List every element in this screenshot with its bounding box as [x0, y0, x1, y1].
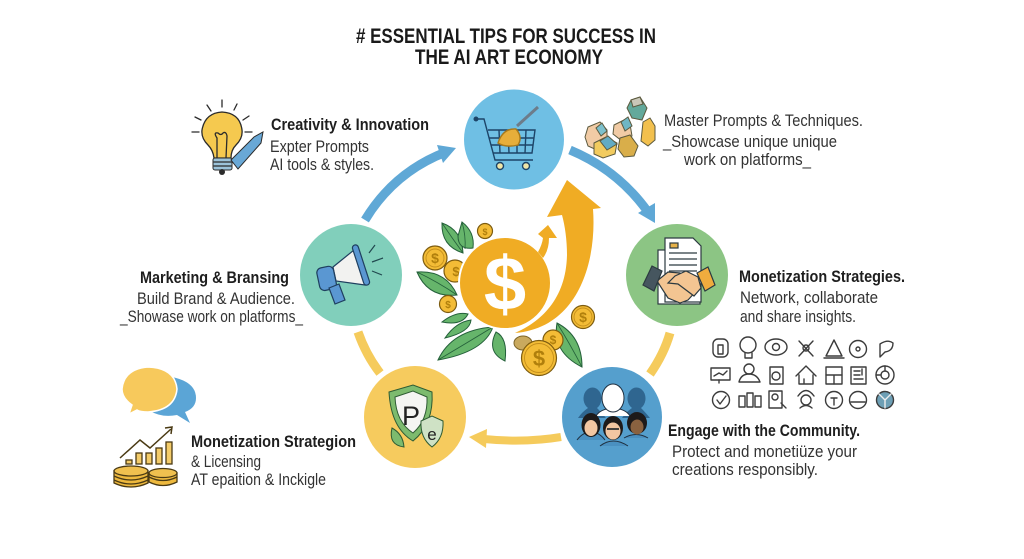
- coins: [423, 224, 594, 376]
- callout: creativity and innovation: [192, 100, 429, 175]
- callout: monetization strategies: [739, 267, 905, 326]
- callout: engage with the community: Engage with the Community.: [668, 421, 860, 440]
- coin behind main coin: $: [452, 264, 460, 279]
- icon: shopping cart: [474, 107, 538, 170]
- callout: monetization strategies: Monetization Strategies.: [739, 267, 905, 286]
- arrow: community to protection: [469, 429, 561, 448]
- callout: marketing and branding: Build Brand & Audience.: [137, 289, 295, 308]
- text: Creativity & Innovation: [271, 115, 429, 134]
- arrow: marketing to top: [365, 145, 456, 220]
- step: protection shield circle: [364, 366, 466, 468]
- text: _Showcase unique unique: [662, 132, 837, 151]
- icon: rising chart and coins: [114, 427, 177, 487]
- step: community circle: [562, 367, 662, 467]
- icon: light bulb and pencil: [192, 100, 263, 175]
- dollar coin: [459, 237, 551, 329]
- text: & Licensing: [191, 452, 261, 471]
- leaves: [417, 222, 582, 367]
- coins: $: [550, 333, 557, 347]
- callout: marketing and branding: [119, 268, 303, 326]
- callout: monetization and licensing: [114, 367, 356, 489]
- coins: $: [431, 250, 439, 266]
- arrow: protection to marketing: [358, 332, 380, 373]
- step: top cart circle: [464, 90, 564, 190]
- text: work on platforms_: [683, 150, 811, 169]
- text: Expter Prompts: [270, 137, 369, 156]
- title: [356, 24, 656, 69]
- text: [191, 432, 356, 489]
- coins: $: [533, 346, 545, 371]
- growth arrow small: [538, 225, 557, 258]
- icon: megaphone: [316, 244, 383, 304]
- icon: shields: P: [402, 401, 420, 431]
- text: AI tools & styles.: [270, 155, 374, 174]
- coins: $: [579, 309, 587, 325]
- icon: people group: [577, 384, 650, 446]
- callout: engage with the community: creations responsibly.: [672, 460, 818, 479]
- text: AT epaition & Inckigle: [191, 470, 326, 489]
- arrow: top to monetization: [570, 150, 655, 223]
- callout: monetization strategies: Network, collaborate: [740, 288, 878, 307]
- icon: shields: [389, 385, 443, 447]
- callout: master prompts: [585, 97, 863, 169]
- arrow: monetization to community: [650, 333, 670, 374]
- callout: marketing and branding: _Showase work on platforms_: [119, 307, 303, 326]
- icon grid: [711, 337, 894, 408]
- central money growth icon: [417, 180, 601, 376]
- callout: engage with the community: [668, 421, 860, 479]
- text: [270, 115, 429, 174]
- text: Master Prompts & Techniques.: [664, 111, 863, 130]
- coin behind main coin: [444, 260, 466, 282]
- callout: engage with the community: Protect and monetiüze your: [672, 442, 857, 461]
- callout: monetization strategies: and share insights.: [740, 307, 856, 326]
- title: THE AI ART ECONOMY: [415, 45, 603, 69]
- title: # ESSENTIAL TIPS FOR SUCCESS IN: [356, 24, 656, 48]
- icon: shields: e: [427, 425, 437, 444]
- icon: speech bubbles: [122, 367, 196, 423]
- callout: marketing and branding: Marketing & Bransing: [140, 268, 289, 287]
- icon: gemstones: [585, 97, 655, 158]
- icon: documents and handshake: [643, 238, 715, 304]
- coins: $: [482, 227, 488, 237]
- step: monetization handshake circle: [626, 224, 728, 326]
- step: marketing megaphone circle: [300, 224, 402, 326]
- coins: $: [445, 300, 451, 311]
- growth arrow large: [515, 180, 601, 333]
- text: Monetization Strategion: [191, 432, 356, 451]
- text: [662, 111, 863, 169]
- dollar coin: $: [484, 242, 526, 327]
